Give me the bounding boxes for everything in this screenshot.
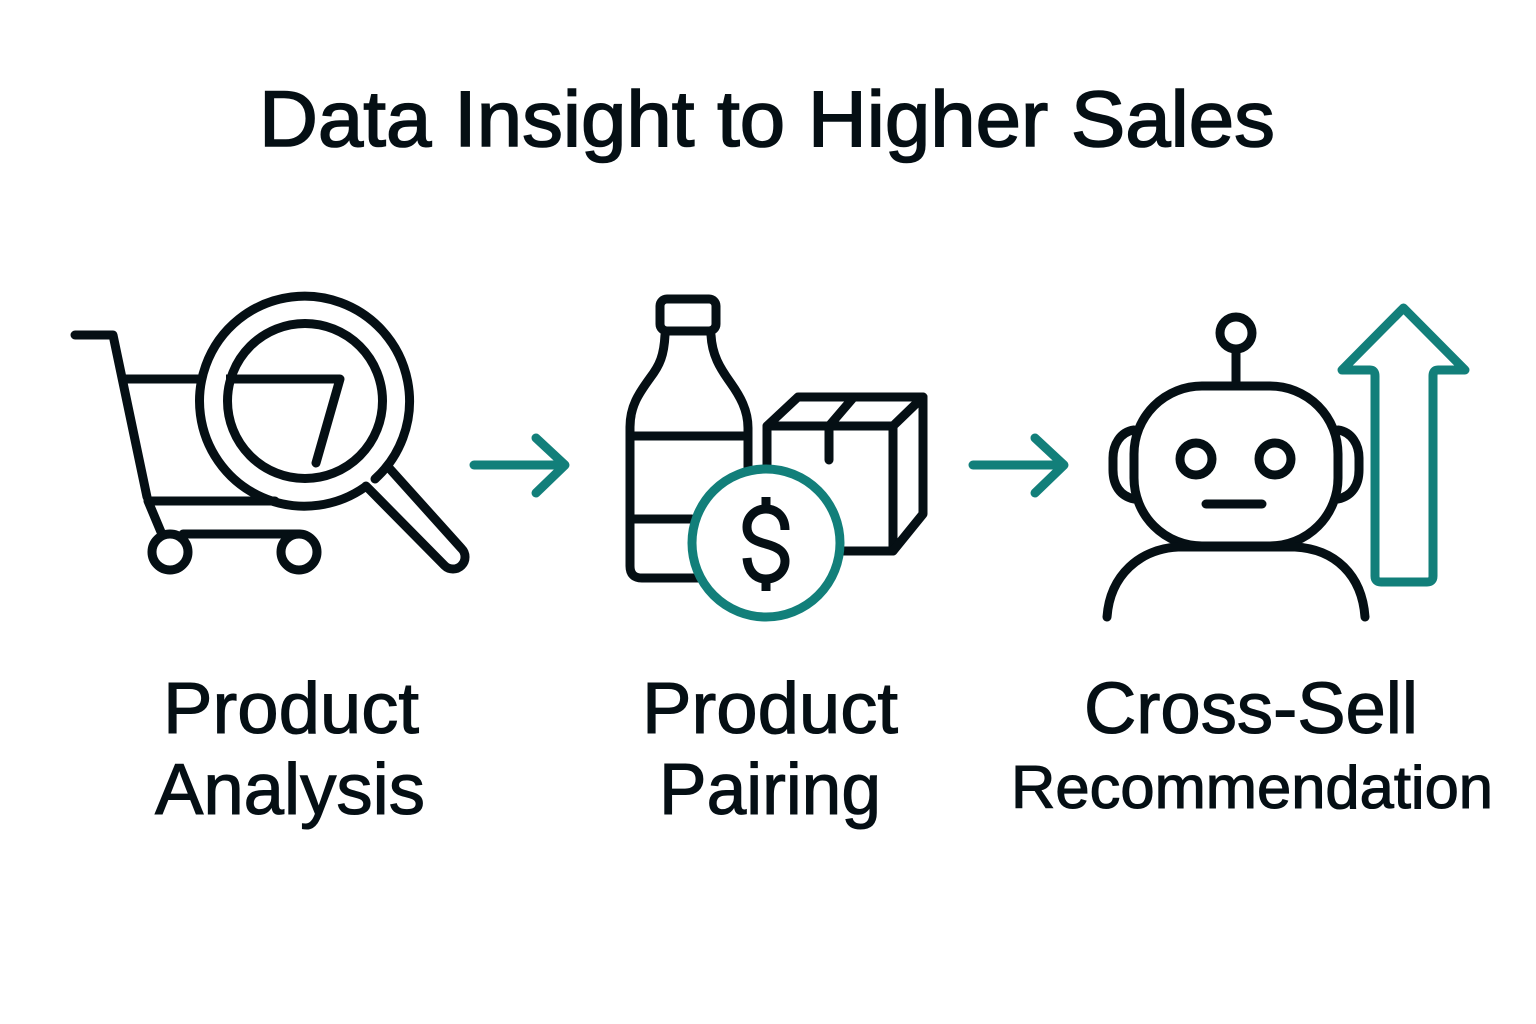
title: Data Insight to Higher Sales [259,74,1275,163]
magnifier rim [200,296,410,506]
magnifier handle [366,469,465,569]
icon: bottle and box [630,299,923,578]
magnifier lens gap mask [201,374,226,384]
bottle [630,299,748,578]
arrow: pairing to recommendation [973,438,1064,493]
cart frame [75,335,340,534]
label: product analysis: Product [163,669,419,749]
label: product pairing: Product [642,669,898,749]
magnifier lens [228,324,382,478]
arrow: analysis to pairing [474,438,565,493]
icon: growth arrow [1342,308,1465,582]
icon: cart with magnifying glass [75,296,465,570]
cart wheels [152,534,317,570]
label: cross-sell recommendation [1011,669,1493,821]
label: product pairing [642,669,898,830]
icon: robot [1107,317,1365,617]
label: cross-sell recommendation: Recommendation [1011,754,1493,821]
label: product analysis [155,669,425,830]
icon: dollar coin [692,469,840,617]
label: cross-sell recommendation: Cross-Sell [1084,669,1418,749]
label: product analysis: Analysis [155,750,425,830]
label: product pairing: Pairing [659,750,881,830]
box [767,397,923,551]
